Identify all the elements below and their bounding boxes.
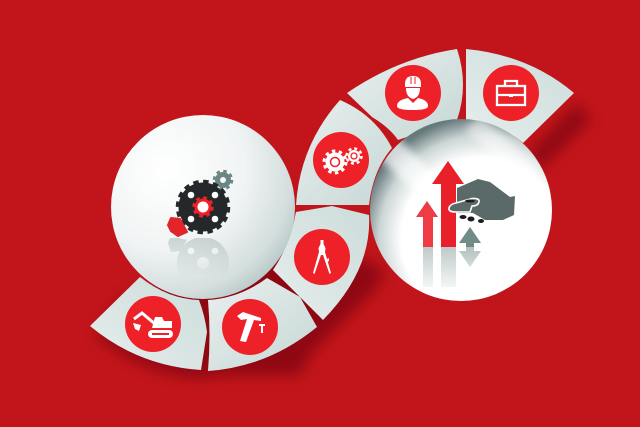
reflection: arrows bbox=[423, 247, 481, 287]
icon: briefcase bbox=[483, 65, 539, 121]
panel: right arrows circle bbox=[370, 115, 552, 301]
icon: drawing compass bbox=[294, 229, 350, 285]
panel: compass segment bbox=[273, 206, 369, 320]
panel: left gear circle bbox=[111, 115, 295, 299]
reflection: gears bbox=[168, 238, 229, 268]
icon: grey gear bbox=[214, 171, 232, 189]
icon: black gear bbox=[178, 182, 228, 232]
icon: hand bbox=[449, 179, 515, 223]
shadows bbox=[96, 103, 590, 378]
icon: small red arrow bbox=[416, 201, 438, 247]
icon: gear cluster bbox=[168, 171, 232, 236]
panel: worker segment bbox=[347, 49, 463, 140]
icon: red gear bbox=[168, 218, 187, 236]
panel: gears segment bbox=[296, 100, 392, 205]
panel: briefcase segment bbox=[466, 49, 574, 143]
panel: excavator segment bbox=[90, 277, 207, 370]
panel: hammer segment bbox=[208, 278, 317, 371]
infographic canvas bbox=[90, 49, 593, 384]
icon: two gears bbox=[313, 132, 369, 188]
icon: hammer bbox=[222, 299, 278, 355]
icon: grey arrow bbox=[459, 227, 481, 247]
icon: excavator bbox=[125, 296, 181, 352]
icon: worker with helmet bbox=[385, 65, 441, 121]
icon: large red arrow bbox=[432, 161, 464, 247]
